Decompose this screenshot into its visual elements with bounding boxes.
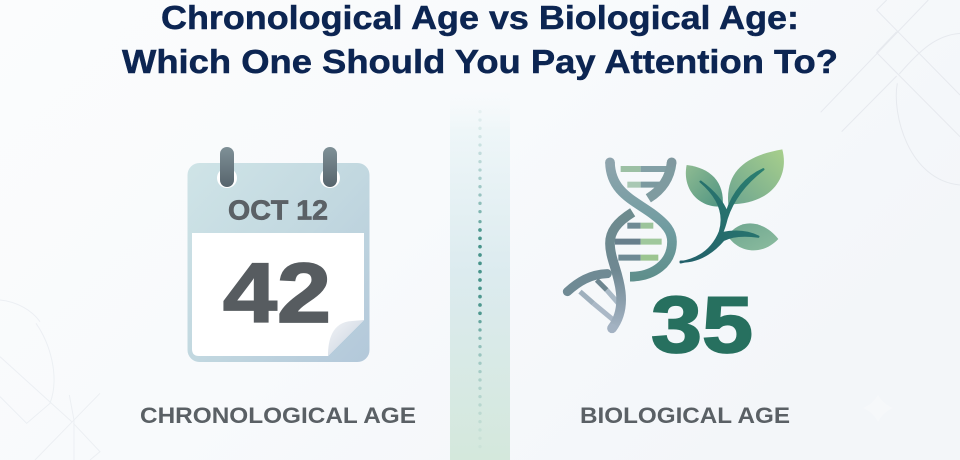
calendar month text: OCT 12 <box>228 194 328 226</box>
icon: plant sprig <box>681 149 784 262</box>
biological number: 35 <box>651 280 753 369</box>
leaf: top right <box>728 149 784 204</box>
title <box>122 0 838 80</box>
label: biological age: BIOLOGICAL AGE <box>580 403 790 428</box>
icon: calendar <box>188 147 370 362</box>
calendar page <box>192 233 364 356</box>
icon: dna helix <box>567 157 676 333</box>
decoration: top-right line pattern <box>821 0 960 185</box>
leaf: right lower <box>728 223 778 250</box>
center divider band <box>450 86 510 460</box>
title: Which One Should You Pay Attention To? <box>122 43 838 80</box>
dna strand B <box>648 162 672 198</box>
decoration: faint sparkle <box>863 395 893 422</box>
page curl <box>328 320 364 356</box>
dna strand A <box>610 162 672 277</box>
leaf: top left <box>686 165 723 207</box>
decoration: bottom-left line pattern <box>0 300 100 460</box>
label: chronological age: CHRONOLOGICAL AGE <box>140 403 416 428</box>
dotted line <box>478 110 482 448</box>
binding ring holes <box>217 168 340 188</box>
calendar number: 42 <box>223 246 331 340</box>
title: Chronological Age vs Biological Age: <box>161 0 799 36</box>
plant stem <box>681 169 763 262</box>
dna rungs <box>580 169 667 320</box>
binding rings <box>220 147 337 187</box>
